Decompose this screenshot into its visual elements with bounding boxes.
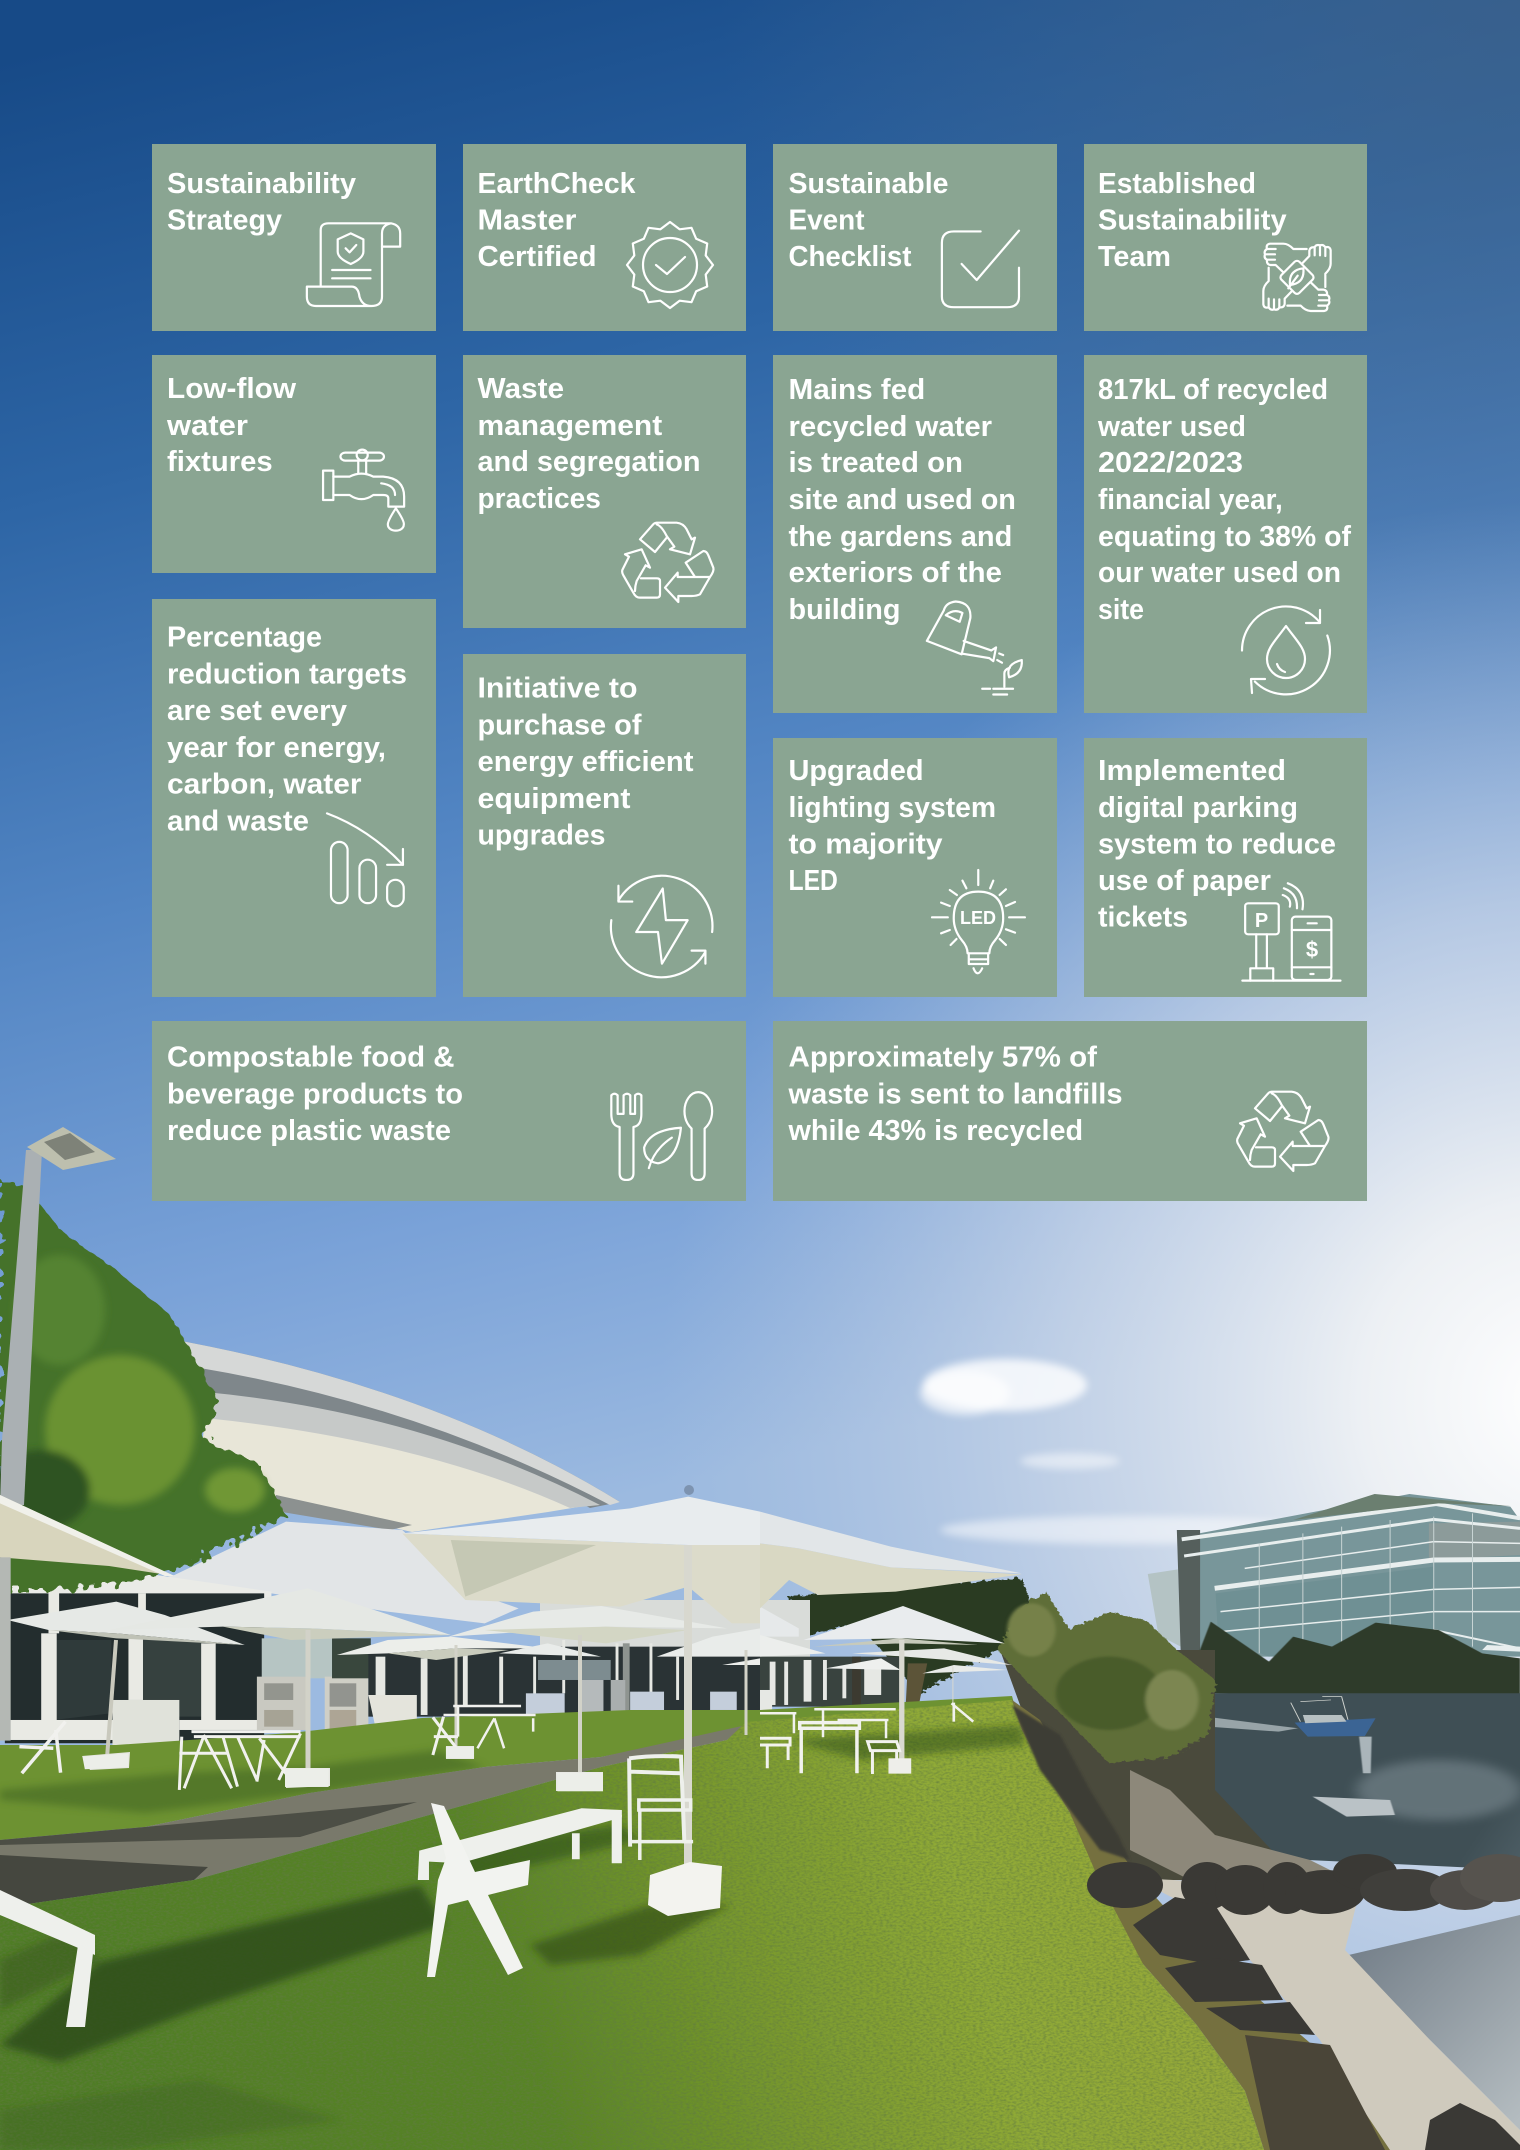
bank	[1012, 1700, 1390, 2150]
icon: certified badge	[627, 222, 713, 308]
panel background	[773, 355, 1057, 713]
panel text: Upgraded	[788, 755, 924, 787]
icon: checkbox	[942, 231, 1019, 307]
apartment block	[1148, 1494, 1520, 1657]
panel background	[463, 144, 746, 331]
lawn shadows	[0, 1725, 1025, 2150]
panel text: while 43% is recycled	[787, 1115, 1083, 1147]
panel text: Master	[478, 204, 576, 236]
panel text: Sustainability	[167, 168, 356, 200]
panel text	[788, 755, 996, 897]
panel background	[463, 355, 746, 628]
panel: Established Sustainability Team	[1084, 144, 1367, 331]
distant trees behind umbrellas	[789, 1578, 1036, 1693]
panel text: Initiative to	[478, 672, 638, 704]
panel: Energy efficient equipment	[463, 654, 746, 997]
panel text: energy efficient	[478, 746, 694, 778]
far bank trees	[1199, 1622, 1520, 1697]
panel background	[1084, 144, 1367, 331]
icon: energy bolt in cycle arrows	[611, 876, 712, 977]
panel: 817kL of recycled water	[1084, 355, 1367, 713]
panel background	[152, 1021, 746, 1201]
icon: fork, leaf and spoon	[611, 1092, 712, 1180]
panel text: financial year,	[1098, 484, 1283, 516]
panel text: 2022/2023	[1098, 447, 1243, 479]
mud flat	[1130, 1770, 1350, 1880]
white bench	[418, 1808, 622, 1880]
panel text: purchase of	[478, 709, 642, 741]
panel: Compostable products	[152, 1021, 746, 1201]
panel: Upgraded lighting	[773, 738, 1057, 997]
panel text	[167, 1042, 463, 1147]
panel: EarthCheck Master Certified	[463, 144, 746, 331]
panel text: Compostable food &	[167, 1042, 454, 1074]
panel: Mains fed recycled water	[773, 355, 1057, 713]
bench, bottom left	[0, 1890, 95, 2027]
panel background	[773, 738, 1057, 997]
right-hand tree	[998, 1592, 1216, 1763]
icon: parking meter and phone	[1242, 883, 1340, 981]
panel text: and waste	[167, 805, 309, 837]
panel background	[463, 654, 746, 997]
panel background	[1084, 738, 1367, 997]
panel text: exteriors of the	[788, 557, 1002, 589]
folding chair, back	[629, 1756, 693, 1860]
panel: Waste management and segregation practices	[463, 355, 746, 628]
panel text: digital parking	[1098, 792, 1298, 824]
icon: watering can and seedling	[927, 601, 1022, 694]
panel: Percentage reduction targets	[152, 599, 436, 997]
footpath	[0, 1722, 760, 1908]
left tree	[0, 1180, 286, 1590]
icon: parking meter and phone: P	[1255, 910, 1268, 932]
panel text: site and used on	[788, 484, 1016, 516]
upper lawn shadow	[0, 1750, 485, 1813]
panel text: fixtures	[167, 446, 273, 478]
panel text	[478, 373, 700, 515]
panel text: are set every	[167, 695, 347, 727]
panel text: our water used on	[1098, 557, 1341, 589]
panel background	[773, 1021, 1367, 1201]
panel: Sustainability Strategy	[152, 144, 436, 331]
icon: LED light bulb: LED	[960, 908, 996, 928]
umbrella poles and bases	[82, 1630, 746, 1791]
panel background	[1084, 355, 1367, 713]
panel text: EarthCheck	[478, 168, 636, 200]
panel text: carbon, water	[167, 769, 362, 801]
main venue wall, glass roof and glazing	[5, 1522, 760, 1747]
panel text: water	[166, 410, 248, 442]
panel text: Sustainable	[788, 168, 948, 200]
tables, far side	[760, 1703, 973, 1774]
panel text: Approximately 57% of	[788, 1042, 1097, 1074]
panel: Digital parking	[1084, 738, 1367, 997]
panel text: system to reduce	[1098, 828, 1336, 860]
panel text: upgrades	[478, 820, 606, 852]
panel text	[788, 168, 948, 273]
panel text	[1098, 168, 1287, 273]
panel text: Implemented	[1098, 755, 1286, 787]
left umbrella	[0, 1495, 174, 1741]
river	[1162, 1693, 1520, 1870]
icon: recycling arrows	[1237, 1092, 1329, 1171]
icon: water drop in cycle arrows	[1242, 606, 1330, 694]
icon: recycling arrows	[622, 523, 714, 602]
panel: Sustainable Event Checklist	[773, 144, 1057, 331]
icon: dripping tap	[323, 450, 404, 531]
photo: venue lawn and river at the water's edge	[0, 1127, 1520, 2150]
panel text: waste is sent to landfills	[787, 1078, 1122, 1110]
panel text: reduce plastic waste	[167, 1115, 451, 1147]
panel: Landfill and recycling split	[773, 1021, 1367, 1201]
panel text: is treated on	[788, 447, 963, 479]
base blocks, back	[82, 1747, 603, 1791]
panel text	[788, 374, 1016, 626]
panel text	[787, 1042, 1122, 1147]
rear building roof and facade	[165, 1338, 620, 1532]
clouds	[920, 1359, 1320, 1544]
panel background	[152, 599, 436, 997]
panel text	[167, 168, 356, 236]
panel text: year for energy,	[167, 732, 386, 764]
panel text: water used	[1097, 411, 1246, 443]
panel text: beverage products to	[167, 1078, 463, 1110]
panel text	[478, 168, 636, 273]
panel background	[773, 144, 1057, 331]
icon: LED light bulb	[932, 870, 1025, 973]
panel text: equipment	[478, 783, 631, 815]
panel text: LED	[788, 865, 838, 897]
panel text	[478, 672, 694, 852]
panel text: Mains fed	[788, 374, 925, 406]
panel: Low-flow water fixtures	[152, 355, 436, 573]
upper lawn	[0, 1696, 1020, 1840]
dark bank backing	[1000, 1650, 1300, 1880]
main umbrella	[402, 1485, 1022, 1916]
panel text: Waste	[478, 373, 564, 405]
sand	[1135, 1878, 1520, 2150]
panel text: recycled water	[788, 411, 992, 443]
panel background	[152, 355, 436, 573]
icon: four joined hands with leaf	[1263, 244, 1331, 311]
panel text: Team	[1098, 241, 1171, 273]
panel text: 817kL of recycled	[1098, 374, 1328, 406]
panel text: Checklist	[788, 241, 912, 273]
panel text	[1097, 374, 1351, 626]
main lawn	[0, 1700, 1264, 2150]
panel text: Strategy	[167, 204, 282, 236]
panel text: Sustainability	[1098, 204, 1287, 236]
panel text: Established	[1098, 168, 1256, 200]
panel text: Low-flow	[167, 373, 297, 405]
rocks	[1012, 1705, 1520, 2150]
panel text: lighting system	[788, 792, 996, 824]
folding chair, foreground	[427, 1803, 530, 1977]
icon: declining bars with arrow	[327, 813, 404, 906]
panel text: tickets	[1098, 902, 1188, 934]
panel text: use of paper	[1098, 865, 1271, 897]
garden tables and folding chairs, back	[19, 1706, 536, 1790]
icon: scroll with shield	[307, 223, 400, 306]
panel text: management	[478, 410, 663, 442]
panel text: Certified	[478, 241, 596, 273]
panel text: reduction targets	[167, 658, 407, 690]
panel text	[166, 373, 297, 478]
umbrellas beyond the main canopy	[760, 1606, 1012, 1774]
panel text: the gardens and	[788, 521, 1012, 553]
panel background	[152, 144, 436, 331]
lower water	[1340, 1915, 1520, 2130]
panel text	[167, 622, 407, 837]
panel text: site	[1098, 594, 1144, 626]
panel text: and segregation	[478, 446, 700, 478]
icon: parking meter and phone: $	[1306, 937, 1318, 962]
panel text: to majority	[788, 828, 943, 860]
panel text: Percentage	[167, 622, 322, 654]
panel text: equating to 38% of	[1098, 521, 1351, 553]
panel text: Event	[788, 204, 865, 236]
backdrop under the main canopy	[540, 1600, 810, 1660]
panel text: building	[788, 594, 900, 626]
umbrellas, mid row	[7, 1588, 760, 1665]
panel text	[1098, 755, 1336, 934]
panel text: practices	[478, 483, 601, 515]
building beyond the tables	[760, 1607, 927, 1717]
street lamp	[0, 1127, 116, 1505]
